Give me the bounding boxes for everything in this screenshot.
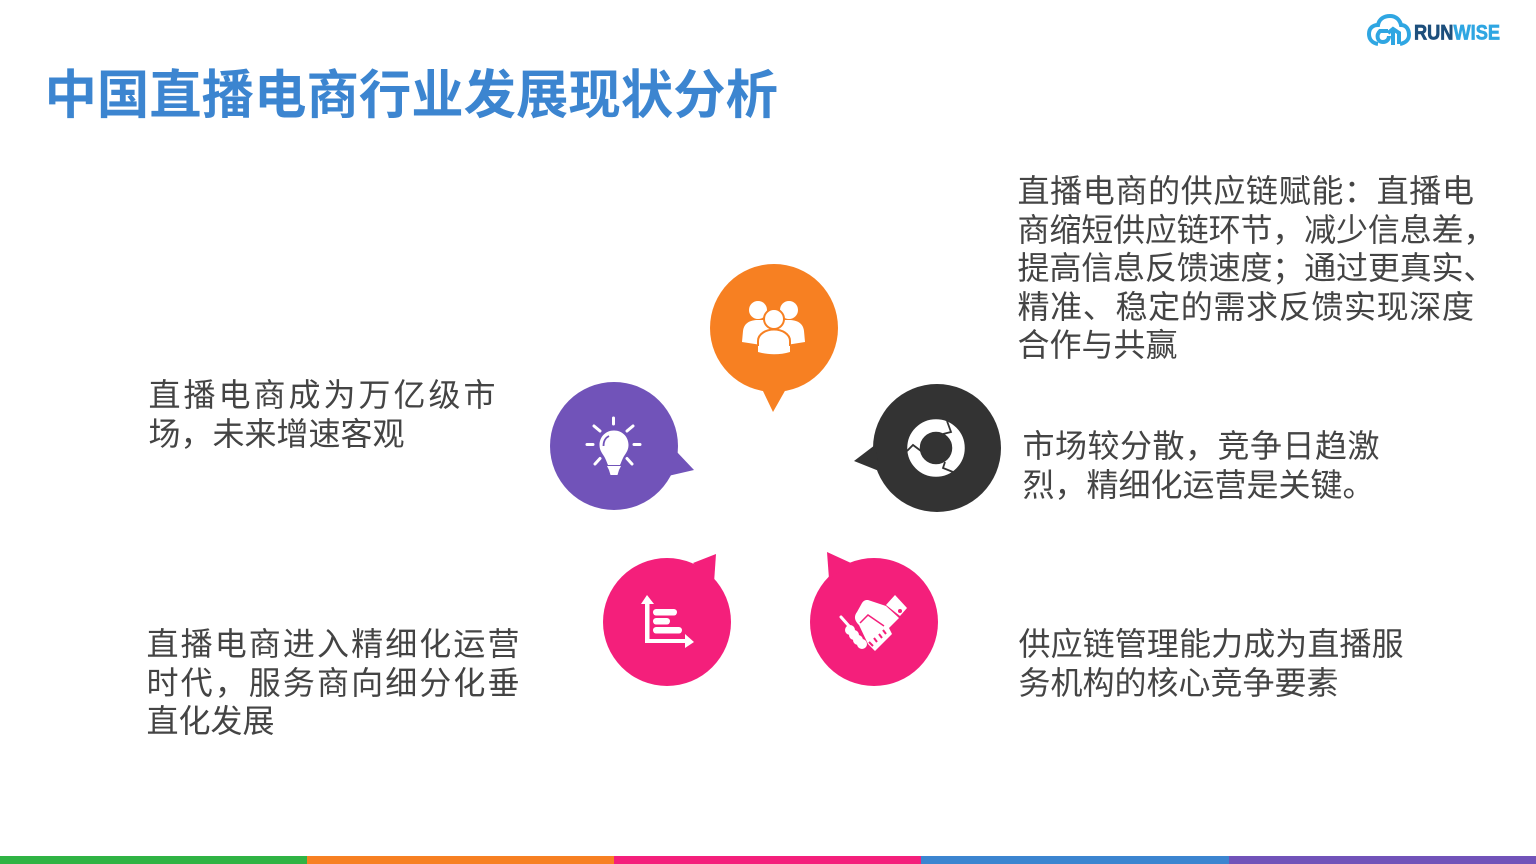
bubble: dark cycle xyxy=(854,384,1001,512)
text: purple bubble point xyxy=(148,377,499,452)
icon: cycle ring xyxy=(907,421,958,472)
text: bottom left point: 时代，服务商向细分化垂 xyxy=(146,664,522,700)
icon: handshake xyxy=(841,595,907,651)
text: top right supply chain point: 直播电商的供应链赋能：直播电 xyxy=(1018,173,1475,209)
text: bottom right point: 供应链管理能力成为直播服 xyxy=(1018,626,1404,662)
text: bottom left point: 直化发展 xyxy=(146,703,275,739)
text: top right supply chain point: 合作与共赢 xyxy=(1018,327,1178,363)
text: top right supply chain point: 提高信息反馈速度；通过更真实、 xyxy=(1018,250,1495,286)
text: bottom left point: 直播电商进入精细化运营 xyxy=(146,626,522,662)
logo wordmark: RUNWISE xyxy=(1414,22,1500,44)
text: right middle point: 烈，精细化运营是关键。 xyxy=(1022,466,1375,502)
bubble: purple light bulb xyxy=(550,382,694,510)
text: top right supply chain point: 精准、稳定的需求反馈实现深度 xyxy=(1018,288,1475,324)
title: 中国直播电商行业发展现状分析 xyxy=(44,67,778,125)
text: bottom right point: 务机构的核心竞争要素 xyxy=(1018,664,1339,700)
icon: people xyxy=(742,301,805,354)
bubble: pink handshake xyxy=(810,552,938,686)
icon: cloud xyxy=(1369,16,1409,45)
text: purple bubble point: 直播电商成为万亿级市 xyxy=(148,377,499,413)
icon: light bulb xyxy=(587,418,640,475)
logo: RUNWISE xyxy=(1367,14,1500,46)
text: top right supply chain point xyxy=(1018,173,1495,363)
text: right middle point: 市场较分散，竞争日趋激 xyxy=(1022,428,1380,464)
text: bottom right point xyxy=(1018,626,1404,700)
text: purple bubble point: 场，未来增速客观 xyxy=(148,416,405,452)
bubble: pink bar chart xyxy=(603,554,731,686)
icon: bar chart xyxy=(641,595,694,648)
text: top right supply chain point: 商缩短供应链环节，减少信息差， xyxy=(1018,212,1495,248)
text: right middle point xyxy=(1022,428,1380,502)
text: bottom left point xyxy=(146,626,522,739)
footer colour bar xyxy=(0,856,1536,864)
bubble: orange people xyxy=(710,264,838,412)
